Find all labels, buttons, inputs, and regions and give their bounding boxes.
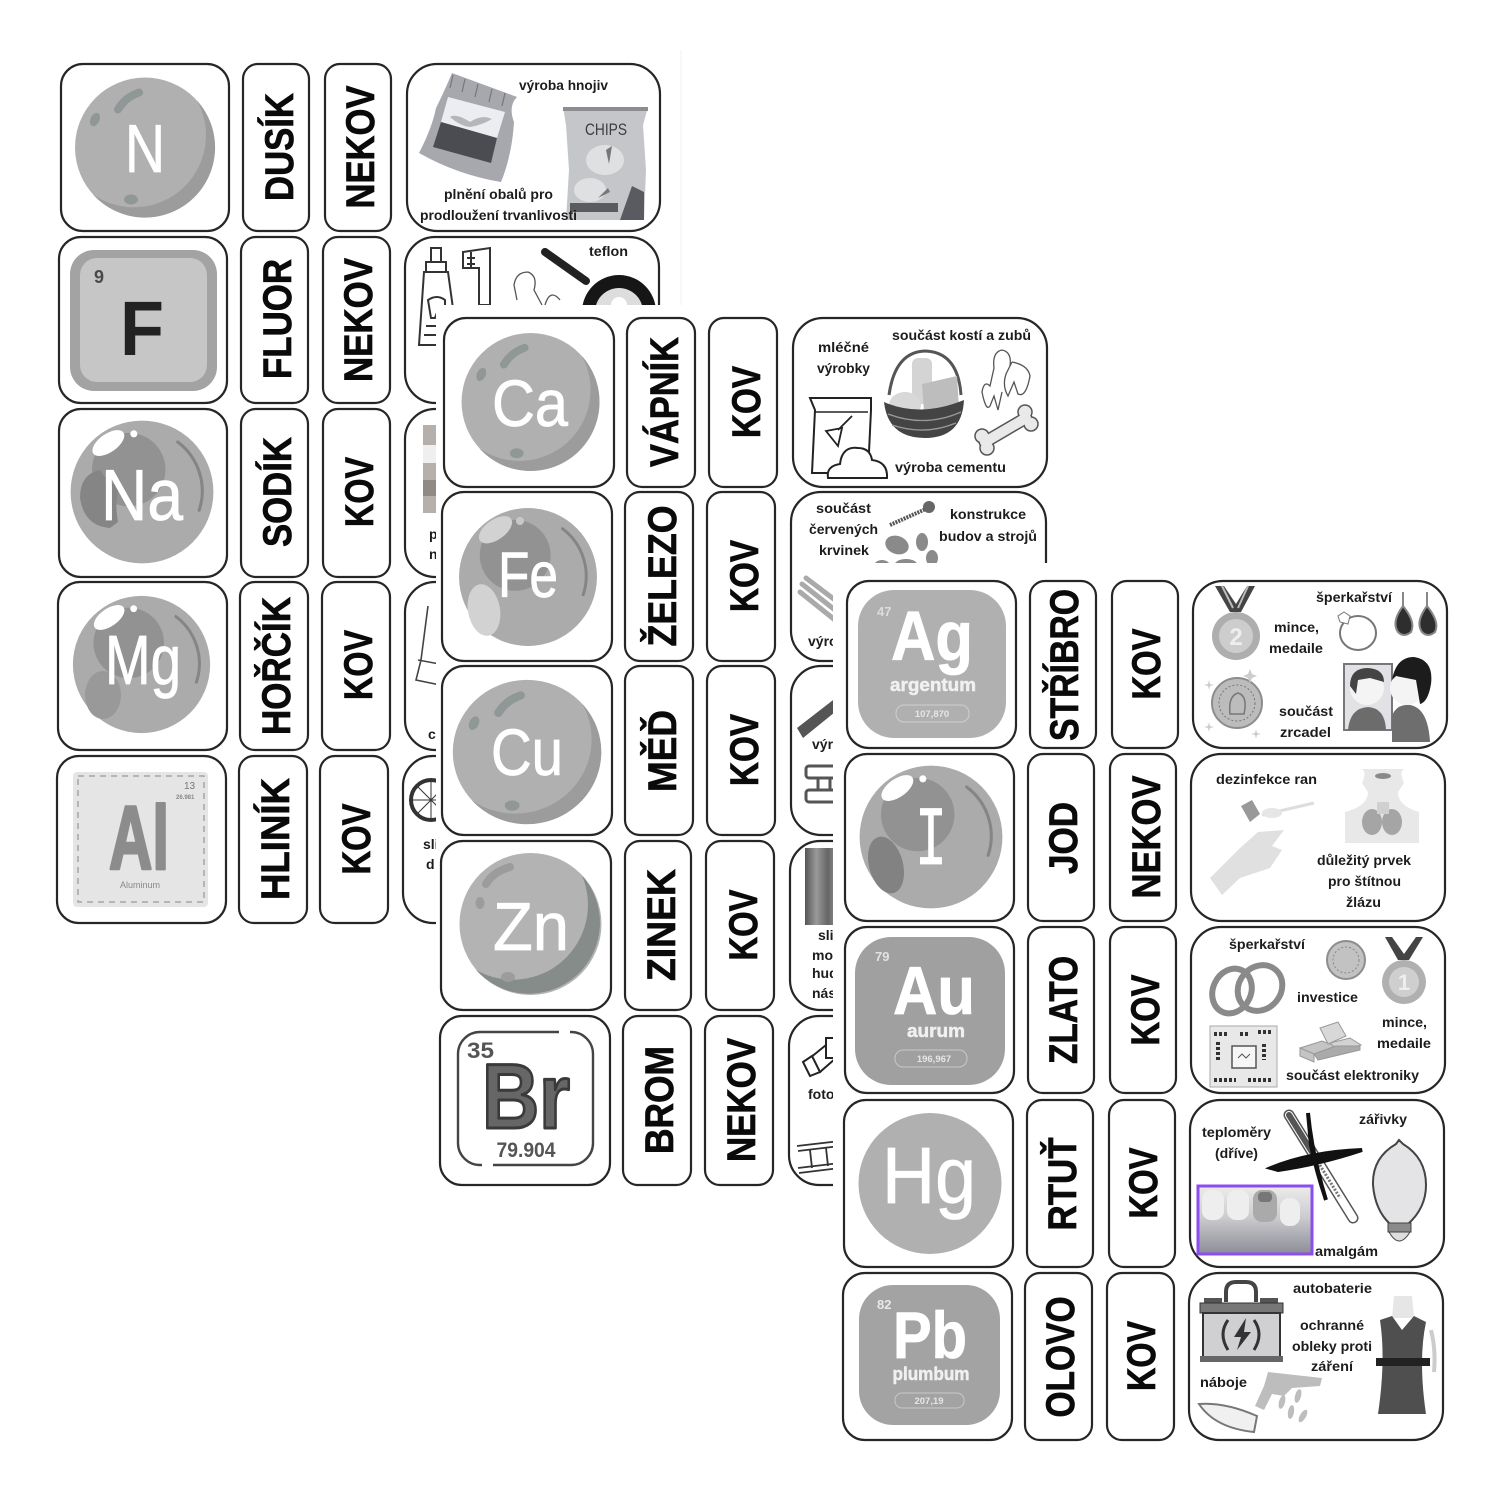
icon: chips bag xyxy=(563,107,648,220)
icon: ring xyxy=(1338,612,1376,650)
row: bromine xyxy=(440,1016,1044,1185)
icon: outlined object xyxy=(416,606,445,686)
icon: film strip xyxy=(797,1141,840,1173)
row: silver xyxy=(847,581,1447,748)
label: MĚĎ: MĚĎ xyxy=(639,710,685,792)
text: mince,: mince, xyxy=(1274,619,1319,635)
icon: Zn ball: Zn xyxy=(493,889,569,965)
row: nitrogen xyxy=(61,64,660,231)
label: KOV: KOV xyxy=(722,889,766,960)
text: mince,: mince, xyxy=(1382,1014,1427,1030)
icon: fertilizer bag xyxy=(419,73,517,182)
text: use fragment: d xyxy=(426,856,435,872)
icon: Br tile: 35 xyxy=(467,1038,494,1063)
text: prodloužení trvanlivosti: prodloužení trvanlivosti xyxy=(420,207,577,223)
icon: Pb tile: plumbum xyxy=(892,1364,970,1384)
icon: steel bars xyxy=(800,578,835,620)
label: HLINÍK: HLINÍK xyxy=(253,778,298,900)
icon: car battery xyxy=(1200,1282,1283,1362)
text: součást kostí a zubů: součást kostí a zubů xyxy=(892,327,1031,343)
row: fluorine xyxy=(59,237,659,403)
icon: Hg disc xyxy=(858,1113,1002,1254)
text: pro štítnou: pro štítnou xyxy=(1328,873,1401,889)
label: ŽELEZO: ŽELEZO xyxy=(639,506,685,646)
icon: gold medal: 1 xyxy=(1398,970,1410,995)
text: záření: záření xyxy=(1311,1358,1354,1374)
icon: Ag tile: argentum xyxy=(890,675,976,695)
text: use fragment: mo xyxy=(812,947,833,963)
icon: dairy basket xyxy=(884,351,964,438)
text: use fragment: výr xyxy=(812,736,834,752)
icon: cement bag xyxy=(810,398,887,478)
sheet 2: Ca, Fe, Cu, Zn, Br xyxy=(436,305,1156,1205)
icon: Zn ball xyxy=(460,853,602,995)
icon: hand and antiseptic xyxy=(1210,800,1314,895)
icon: Pb tile: 82 xyxy=(877,1297,891,1312)
icon: tooth outline xyxy=(514,272,560,305)
text: žlázu: žlázu xyxy=(1346,894,1381,910)
icon: Na bubble xyxy=(71,421,213,563)
label: KOV: KOV xyxy=(1125,628,1169,700)
icon: N ball xyxy=(75,78,215,218)
icon: gold medal xyxy=(1382,937,1426,1004)
text: amalgám: amalgám xyxy=(1315,1243,1378,1259)
icon: Au tile: 196,967 xyxy=(917,1054,951,1065)
label: KOV: KOV xyxy=(335,803,379,874)
label: NEKOV: NEKOV xyxy=(339,85,383,208)
label: NEKOV: NEKOV xyxy=(337,258,381,382)
row: iodine xyxy=(845,754,1445,921)
row: mercury xyxy=(844,1100,1444,1267)
text: budov a strojů: budov a strojů xyxy=(939,528,1037,544)
text: teflon: teflon xyxy=(589,243,628,259)
text: use fragment: nás xyxy=(812,985,836,1001)
icon: circuit board xyxy=(1210,1026,1277,1087)
icon: dark bar xyxy=(797,697,840,738)
row: sodium xyxy=(59,409,659,577)
icon: amalgam filling photo xyxy=(1198,1186,1312,1254)
text: use fragment: c xyxy=(428,726,436,742)
text: obleky proti: obleky proti xyxy=(1292,1338,1372,1354)
icon: Au tile: Au xyxy=(893,953,975,1029)
icon: boy with mirror xyxy=(1344,657,1431,742)
icon: Au tile: 79 xyxy=(875,949,889,964)
icon: gold coin xyxy=(1327,941,1365,979)
label: VÁPNÍK: VÁPNÍK xyxy=(642,337,687,467)
icon: Al tile: 13 xyxy=(184,781,196,792)
icon: Ca ball xyxy=(462,333,600,471)
icon: F tile: F xyxy=(120,286,164,372)
icon: neck and thyroid xyxy=(1345,769,1419,843)
label: KOV: KOV xyxy=(723,714,767,786)
icon: silver medal: 2 xyxy=(1229,624,1243,651)
icon: teeth xyxy=(982,350,1030,410)
row: lead xyxy=(843,1273,1443,1440)
label: STŘÍBRO: STŘÍBRO xyxy=(1041,589,1087,741)
text: náboje: náboje xyxy=(1200,1374,1247,1390)
label: KOV: KOV xyxy=(338,457,382,527)
text: plnění obalů pro: plnění obalů pro xyxy=(444,186,553,202)
icon: earrings xyxy=(1395,592,1436,635)
text: investice: investice xyxy=(1297,989,1358,1005)
icon: Fe bubble xyxy=(459,508,597,646)
icon: frying pan xyxy=(545,252,656,349)
icon: bulb xyxy=(1373,1140,1426,1241)
icon: Mg bubble xyxy=(73,596,210,733)
row: zinc xyxy=(441,841,1045,1010)
icon: grey container xyxy=(423,425,443,513)
icon: N ball: N xyxy=(125,111,165,187)
icon: coin xyxy=(1204,669,1262,739)
icon: screw xyxy=(890,501,935,525)
icon: Ag tile: Ag xyxy=(891,597,973,675)
icon: Pb tile: Pb xyxy=(893,1298,967,1372)
text: červených: červených xyxy=(809,521,878,537)
icon: crossed thermometer xyxy=(1271,1113,1362,1218)
icon: Ag tile: 47 xyxy=(877,604,891,619)
sheet 1: N, F, Na, Mg, Al xyxy=(57,50,681,923)
label: SODÍK: SODÍK xyxy=(255,437,300,547)
text: medaile: medaile xyxy=(1269,640,1323,656)
row: copper xyxy=(442,666,1046,835)
icon: I bubble xyxy=(860,766,1002,908)
label: OLOVO: OLOVO xyxy=(1039,1296,1083,1418)
label: KOV: KOV xyxy=(337,630,381,700)
icon: large bullet xyxy=(1199,1404,1257,1432)
text: ochranné: ochranné xyxy=(1300,1317,1364,1333)
icon: Al tile: 26.981 xyxy=(176,795,195,801)
icon: wedding rings xyxy=(1205,956,1292,1020)
text: use fragment: foto xyxy=(808,1086,834,1102)
icon: Ca ball: Ca xyxy=(492,366,568,440)
row: calcium xyxy=(444,318,1047,487)
icon: Al tile xyxy=(73,772,208,907)
label: NEKOV: NEKOV xyxy=(720,1038,764,1162)
label: JOD: JOD xyxy=(1042,802,1086,874)
text: krvinek: krvinek xyxy=(819,542,869,558)
icon: toothpaste and toothbrush xyxy=(419,248,490,345)
text: (dříve): (dříve) xyxy=(1215,1145,1258,1161)
icon: Cu ball: Cu xyxy=(491,715,563,789)
icon: Cu ball xyxy=(453,680,601,824)
text: šperkařství: šperkařství xyxy=(1229,936,1306,952)
text: use fragment: hud xyxy=(812,965,838,981)
icon: Br tile xyxy=(458,1028,593,1169)
label: FLUOR: FLUOR xyxy=(256,259,300,379)
text: zrcadel: zrcadel xyxy=(1280,724,1331,740)
label: ZLATO: ZLATO xyxy=(1042,956,1086,1064)
icon: Au tile: aurum xyxy=(907,1021,965,1041)
icon: Hg disc: Hg xyxy=(882,1131,976,1220)
text: výroba hnojiv: výroba hnojiv xyxy=(519,77,608,93)
icon: Fe bubble: Fe xyxy=(498,539,558,611)
sheet 3: Ag, I, Au, Hg, Pb xyxy=(833,563,1500,1500)
label: KOV: KOV xyxy=(725,366,769,438)
row: iron xyxy=(442,492,1046,661)
icon: Al tile: Aluminum xyxy=(120,880,160,890)
row: gold xyxy=(845,927,1445,1093)
icon: silver medal xyxy=(1212,586,1260,660)
icon: chips bag: CHIPS xyxy=(585,120,627,139)
label: NEKOV: NEKOV xyxy=(1125,775,1169,898)
icon: blood cells xyxy=(874,532,938,573)
icon: camera flash xyxy=(803,1038,838,1076)
text: konstrukce: konstrukce xyxy=(950,506,1026,522)
row: magnesium xyxy=(58,582,659,750)
label: RTUŤ: RTUŤ xyxy=(1039,1138,1085,1230)
icon: I bubble: I xyxy=(915,795,947,890)
icon: pipes xyxy=(806,766,846,802)
icon: corrugated sheet xyxy=(805,848,843,925)
text: důležitý prvek: důležitý prvek xyxy=(1317,852,1411,868)
text: výrobky: výrobky xyxy=(817,360,870,376)
label: DUSÍK: DUSÍK xyxy=(257,93,302,201)
text: součást: součást xyxy=(816,500,871,516)
icon: wheel xyxy=(411,780,451,820)
icon: Pb tile: 207,19 xyxy=(914,1396,944,1407)
text: use fragment: p xyxy=(429,526,438,542)
icon: Ag tile xyxy=(858,590,1006,738)
row: aluminium xyxy=(57,756,657,923)
label: KOV: KOV xyxy=(1122,1147,1166,1218)
icon: revolver and bullets xyxy=(1255,1372,1322,1424)
text: součást elektroniky: součást elektroniky xyxy=(1286,1067,1419,1083)
text: výroba cementu: výroba cementu xyxy=(895,459,1006,475)
text: use fragment: sli xyxy=(423,836,439,852)
label: KOV: KOV xyxy=(723,540,767,612)
icon: bone xyxy=(975,405,1038,455)
icon: Na bubble: Na xyxy=(101,456,184,536)
text: dezinfekce ran: dezinfekce ran xyxy=(1216,771,1317,787)
icon: F tile: 9 xyxy=(94,267,104,287)
text: autobaterie: autobaterie xyxy=(1293,1280,1372,1296)
icon: protective apron xyxy=(1376,1296,1435,1414)
text: medaile: medaile xyxy=(1377,1035,1431,1051)
icon: Al tile: Al xyxy=(109,789,169,889)
text: šperkařství: šperkařství xyxy=(1316,589,1393,605)
icon: Ag tile: 107,870 xyxy=(915,709,949,720)
label: BROM: BROM xyxy=(638,1046,682,1154)
text: mléčné: mléčné xyxy=(818,339,869,355)
icon: Mg bubble: Mg xyxy=(105,621,181,699)
icon: Br tile: 79.904 xyxy=(496,1139,556,1162)
label: KOV: KOV xyxy=(1124,974,1168,1046)
text: součást: součást xyxy=(1279,703,1333,719)
icon: Pb tile xyxy=(859,1285,1000,1425)
icon: F tile xyxy=(70,250,217,391)
text: use fragment: n xyxy=(429,546,438,562)
text: use fragment: sli xyxy=(818,927,834,943)
label: KOV: KOV xyxy=(1120,1321,1164,1391)
icon: gold bars xyxy=(1300,1022,1361,1062)
label: HOŘČÍK: HOŘČÍK xyxy=(253,597,299,735)
text: teploměry: teploměry xyxy=(1202,1124,1271,1140)
label: ZINEK: ZINEK xyxy=(640,869,684,981)
text: zářivky: zářivky xyxy=(1359,1111,1407,1127)
text: use fragment: výro xyxy=(808,633,838,649)
icon: Br tile: Br xyxy=(482,1046,570,1148)
icon: Au tile xyxy=(855,937,1005,1085)
